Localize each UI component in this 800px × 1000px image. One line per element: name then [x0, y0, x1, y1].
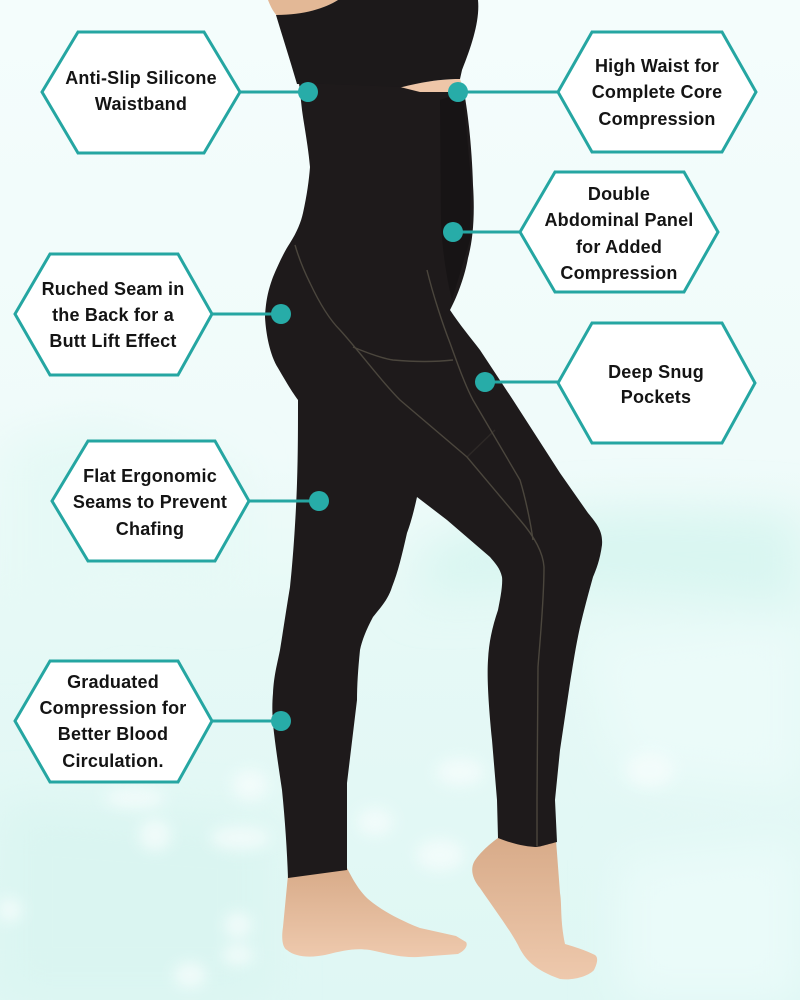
callout: High Waist for Complete Core Compression: High Waist for	[595, 56, 719, 76]
leggings body	[265, 83, 602, 878]
sports bra	[276, 0, 478, 88]
callout: Double Abdominal Panel for Added Compression: Compression	[560, 263, 678, 283]
callout: Graduated Compression for Better Blood Circulation: Graduated	[67, 672, 159, 692]
callout: Double Abdominal Panel for Added Compression	[443, 172, 718, 292]
side panel shading	[440, 92, 471, 300]
callout: Flat Ergonomic Seams to Prevent Chafing: Seams to Prevent	[73, 492, 227, 512]
callout: Graduated Compression for Better Blood Circulation: Compression for	[39, 698, 187, 718]
callout: Ruched Seam in the Back for a Butt Lift Effect: Butt Lift Effect	[49, 331, 177, 351]
callout: High Waist for Complete Core Compression: Compression	[598, 109, 716, 129]
callout: Double Abdominal Panel for Added Compression: Double	[588, 184, 650, 204]
right foot	[472, 838, 597, 979]
callout: Anti-Slip Silicone Waistband	[42, 32, 318, 153]
left foot	[282, 868, 467, 957]
callout: Deep Snug Pockets	[475, 323, 755, 443]
callout: Ruched Seam in the Back for a Butt Lift Effect	[15, 254, 291, 375]
model wearing leggings	[265, 0, 602, 979]
callout: Graduated Compression for Better Blood Circulation: Better Blood	[58, 724, 168, 744]
callout: Ruched Seam in the Back for a Butt Lift Effect: Ruched Seam in	[42, 279, 184, 299]
callout: Ruched Seam in the Back for a Butt Lift Effect: the Back for a	[52, 305, 175, 325]
callout: Graduated Compression for Better Blood Circulation	[15, 661, 291, 782]
callout: Flat Ergonomic Seams to Prevent Chafing: Chafing	[116, 519, 184, 539]
callout: Deep Snug Pockets: Deep Snug	[608, 362, 704, 382]
callout: High Waist for Complete Core Compression: Complete Core	[592, 82, 722, 102]
callout: Flat Ergonomic Seams to Prevent Chafing	[52, 441, 329, 561]
callout: Double Abdominal Panel for Added Compression: Abdominal Panel	[544, 210, 694, 230]
callout: Double Abdominal Panel for Added Compression: for Added	[576, 237, 662, 257]
midriff skin	[398, 79, 463, 93]
callout: Anti-Slip Silicone Waistband: Waistband	[95, 94, 187, 114]
seams	[295, 245, 544, 846]
callout: Graduated Compression for Better Blood Circulation: Circulation.	[62, 751, 164, 771]
callout: Anti-Slip Silicone Waistband: Anti-Slip Silicone	[65, 68, 217, 88]
callout: Flat Ergonomic Seams to Prevent Chafing: Flat Ergonomic	[83, 466, 217, 486]
upper arm skin	[268, 0, 338, 16]
callout: High Waist for Complete Core Compression	[448, 32, 756, 152]
callout: Deep Snug Pockets: Pockets	[621, 387, 691, 407]
